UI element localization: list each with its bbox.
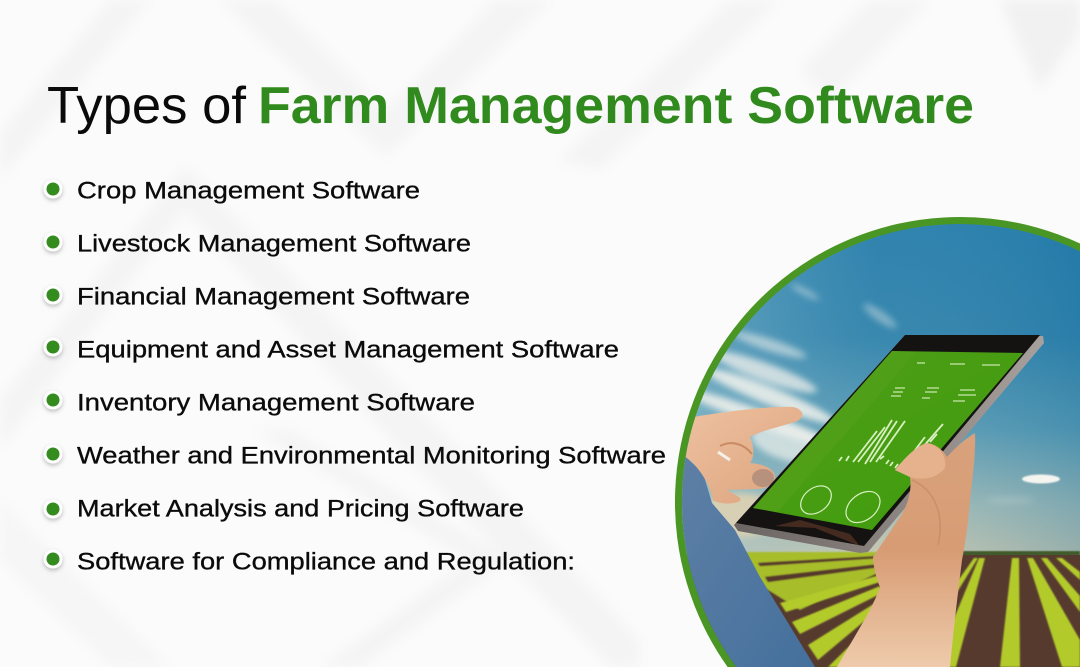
dashboard rows <box>891 363 1000 401</box>
bullet list <box>44 178 666 576</box>
item: livestock: Livestock Management Software <box>77 230 471 258</box>
sky <box>676 218 1080 558</box>
item: equipment: Equipment and Asset Management Software <box>77 336 619 364</box>
tablet screen <box>753 351 1023 530</box>
screen reflection <box>775 520 860 546</box>
field <box>676 552 1080 667</box>
item: weather: Weather and Environmental Monitoring Software <box>77 442 666 470</box>
small cloud <box>1022 474 1060 484</box>
title: plain part: Types of <box>47 77 247 135</box>
sleeve <box>676 450 815 667</box>
pointing hand <box>676 407 802 504</box>
item: market: Market Analysis and Pricing Software <box>77 496 524 522</box>
item: compliance: Software for Compliance and Regulation: <box>77 548 575 576</box>
photo circle: farmer using a tablet in a field <box>675 217 1080 667</box>
item: crop: Crop Management Software <box>77 178 420 204</box>
title <box>47 77 974 135</box>
distant tree line <box>963 550 1080 555</box>
title: green part: Farm Management Software <box>258 77 974 135</box>
item: inventory: Inventory Management Software <box>77 390 475 416</box>
bar chart <box>839 420 943 468</box>
holding hand <box>837 433 975 667</box>
gauges <box>800 485 881 524</box>
tablet <box>734 335 1044 553</box>
item: financial: Financial Management Software <box>77 284 470 310</box>
